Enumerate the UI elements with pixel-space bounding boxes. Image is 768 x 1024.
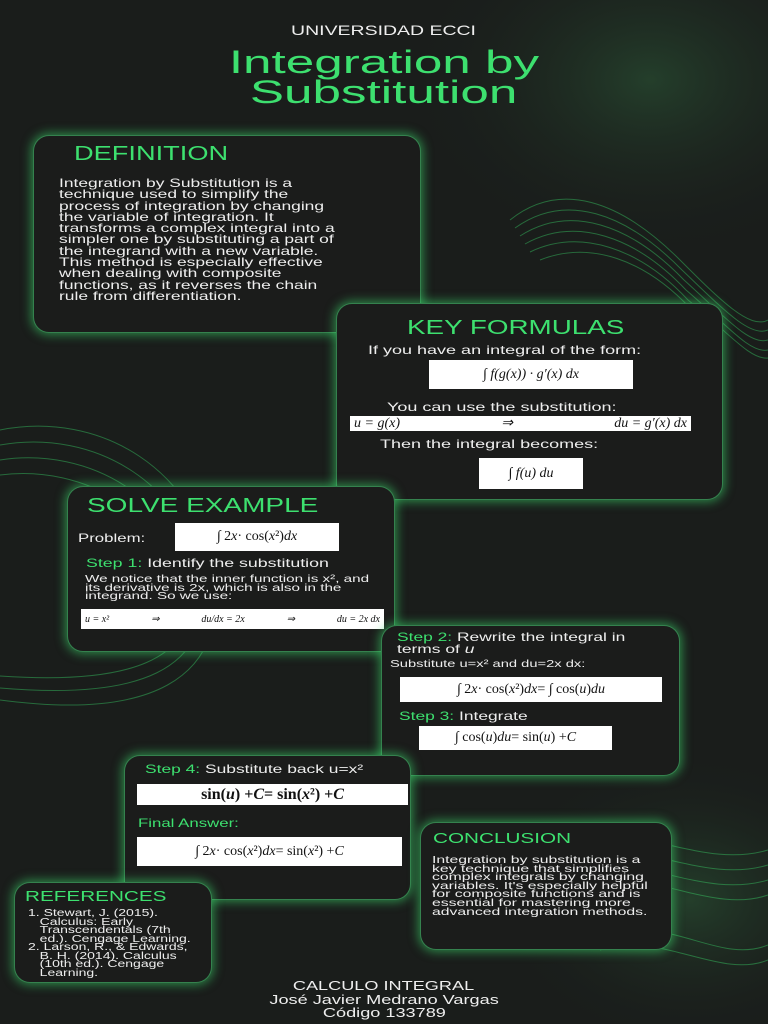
text: Then the integral becomes: bbox=[380, 437, 598, 451]
formula final: C bbox=[334, 844, 344, 858]
formula final: x bbox=[210, 844, 216, 858]
panel: references bbox=[14, 882, 212, 983]
formula step4: C bbox=[333, 786, 344, 802]
formula step2: dx bbox=[524, 682, 537, 696]
formula step3 bbox=[419, 726, 612, 750]
formula step2: x bbox=[471, 682, 478, 696]
footer: CALCULO INTEGRAL bbox=[293, 979, 475, 993]
formula 2 bbox=[350, 416, 691, 431]
formula 2: u = g(x) bbox=[354, 416, 400, 430]
formula step1: u = x² bbox=[85, 614, 109, 624]
formula step3: u bbox=[544, 730, 551, 745]
heading: conclusion: CONCLUSION bbox=[433, 830, 571, 847]
formula final: dx bbox=[262, 844, 276, 858]
step 1 text: We notice that the inner function is x², and its derivative is 2x, which is also in the integrand. So we use: bbox=[85, 573, 369, 602]
formula step1: ⇒ bbox=[287, 614, 295, 624]
formula problem: dx bbox=[284, 529, 297, 544]
formula step3: C bbox=[567, 730, 576, 745]
header: university: UNIVERSIDAD ECCI bbox=[292, 22, 476, 38]
final answer label: Final Answer: bbox=[138, 816, 239, 830]
text: references: 2. Larson, R., & Edwards, bbox=[28, 942, 188, 953]
step 4: Step 4: Substitute back u=x² bbox=[145, 762, 363, 776]
footer bbox=[269, 979, 499, 1020]
formula step2 bbox=[400, 677, 662, 702]
text: references: B. H. (2014). Calculus bbox=[40, 950, 177, 962]
text: You can use the substitution: bbox=[387, 400, 616, 414]
formula final: ∫ 2 · cos( ²) = sin( ²) + bbox=[195, 844, 334, 858]
title bbox=[229, 44, 539, 110]
formula step1: du = 2x dx bbox=[337, 614, 380, 624]
title: Integration by bbox=[229, 44, 539, 80]
formula problem bbox=[175, 523, 339, 551]
text: references: Transcendentals (7th bbox=[40, 925, 171, 936]
formula step4: u bbox=[226, 786, 235, 802]
text: references: ed.). Cengage Learning. bbox=[40, 934, 191, 944]
text: references: (10th ed.). Cengage bbox=[40, 959, 164, 970]
formula 1 bbox=[429, 360, 633, 389]
heading: references: REFERENCES bbox=[25, 888, 166, 905]
step 2: Step 2: Rewrite the integral in bbox=[397, 630, 625, 644]
formula problem: ∫ 2 · cos( ²) bbox=[217, 529, 284, 544]
formula final: x bbox=[247, 844, 253, 858]
text: references: 1. Stewart, J. (2015). bbox=[28, 908, 158, 919]
heading: definition: DEFINITION bbox=[74, 143, 228, 165]
formula step3: ∫ cos( ) = sin( ) + bbox=[455, 730, 567, 745]
text: definition: Integration by Substitution is a technique used to simplify the process of integration by changing the variable of integration. It transforms a complex integral into a simpler one by substituting a part of the integrand with a new variable. This method is especially effective when dealing with composite functions, as it reverses the chain rule from differentiation. bbox=[59, 176, 335, 303]
panel: solve example bbox=[67, 486, 395, 652]
formula step2: u bbox=[579, 682, 586, 696]
step 3: Step 3: Integrate bbox=[399, 709, 528, 723]
formula 3: ∫ f(u) du bbox=[508, 466, 554, 480]
formula step2: x bbox=[509, 682, 515, 696]
formula step3: u bbox=[486, 730, 493, 745]
panel: steps 2 and 3 bbox=[381, 625, 680, 776]
heading: solve example: SOLVE EXAMPLE bbox=[87, 495, 318, 517]
formula step4: C bbox=[253, 786, 264, 802]
panel: definition bbox=[33, 135, 421, 333]
text: intro: If you have an integral of the form: bbox=[368, 343, 641, 357]
step 2: terms of u bbox=[397, 642, 474, 656]
formula step4: sin( ) + = sin( ²) + bbox=[201, 786, 333, 802]
panel: key formulas bbox=[336, 303, 723, 500]
formula 2: ⇒ bbox=[501, 416, 513, 431]
formula step2: du bbox=[591, 682, 605, 696]
step 2 text: Substitute u=x² and du=2x dx: bbox=[390, 658, 585, 670]
panel: conclusion bbox=[420, 822, 672, 950]
footer: José Javier Medrano Vargas bbox=[269, 992, 499, 1006]
title: Substitution bbox=[250, 74, 518, 110]
formula step4: x bbox=[302, 786, 310, 802]
text: references bbox=[28, 908, 191, 978]
formula step4 bbox=[137, 784, 408, 805]
footer: Código 133789 bbox=[323, 1006, 445, 1020]
formula problem: x bbox=[269, 529, 275, 544]
formula step1 bbox=[81, 609, 384, 629]
formula step3: du bbox=[497, 730, 511, 745]
formula final: x bbox=[308, 844, 314, 858]
formula step2: ∫ 2 · cos( ²) = ∫ cos( ) bbox=[457, 682, 591, 696]
formula 1: ∫ f(g(x)) · g′(x) dx bbox=[483, 366, 579, 382]
formula 3 bbox=[479, 458, 583, 489]
problem: Problem: bbox=[78, 531, 145, 545]
text: references: Calculus: Early bbox=[40, 916, 133, 928]
heading: key formulas: KEY FORMULAS bbox=[407, 317, 624, 339]
text: references: Learning. bbox=[40, 968, 98, 978]
formula step1: ⇒ bbox=[151, 614, 159, 624]
formula 2: du = g′(x) dx bbox=[614, 416, 687, 430]
formula step1: du/dx = 2x bbox=[201, 614, 245, 624]
panel: step 4 bbox=[124, 755, 411, 900]
step 2 bbox=[397, 630, 625, 656]
formula problem: x bbox=[231, 529, 237, 544]
step 1: Step 1: Identify the substitution bbox=[86, 556, 329, 570]
text: conclusion: Integration by substitution is a key technique that simplifies complex integrals by changing variables. It's especially helpful for composite functions and is essential for mastering more advanced integration methods. bbox=[432, 854, 648, 918]
formula final bbox=[137, 837, 402, 866]
